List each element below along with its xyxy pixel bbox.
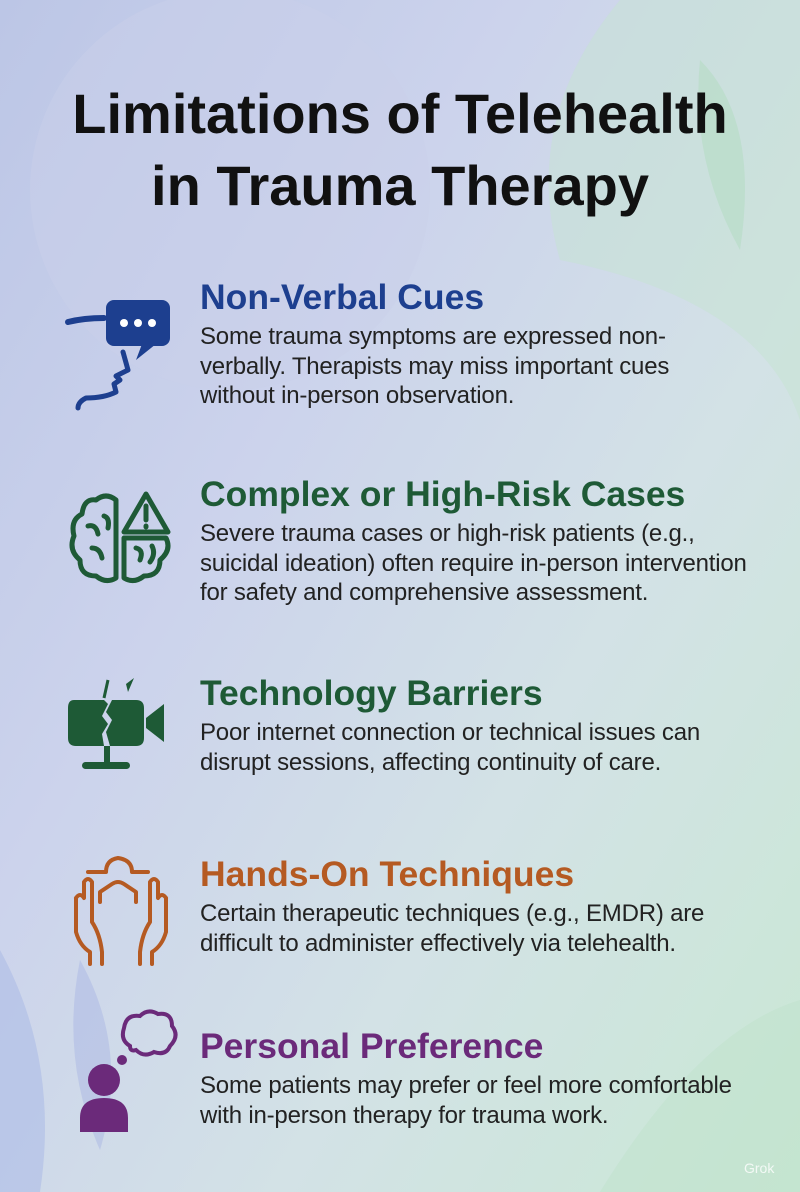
title: Limitations of Telehealth (72, 82, 728, 145)
heading + text: technology barriers: Poor internet connection or technical issues can (200, 719, 700, 746)
title (72, 82, 728, 217)
title: in Trauma Therapy (151, 154, 649, 217)
heading + text: hands-on techniques (200, 854, 704, 956)
heading + text: non-verbal cues (200, 277, 669, 409)
icon: face with speech bubble (65, 300, 170, 410)
heading + text: technology barriers (200, 673, 700, 776)
heading + text: personal preference: with in-person therapy for trauma work. (200, 1102, 608, 1128)
heading + text: hands-on techniques: Hands-On Techniques (200, 854, 574, 894)
icon: person with thought cloud (80, 1009, 178, 1132)
heading + text: complex cases (200, 474, 747, 606)
heading + text: non-verbal cues: Some trauma symptoms are expressed non- (200, 323, 666, 350)
watermark: Grok (744, 1160, 774, 1176)
icon: broken video camera (68, 678, 164, 769)
icon: hands holding person (74, 856, 168, 966)
heading + text: complex cases: for safety and comprehensive assessment. (200, 579, 648, 606)
heading + text: hands-on techniques: Certain therapeutic techniques (e.g., EMDR) are (200, 900, 704, 927)
heading + text: complex cases: suicidal ideation) often require in-person intervention (200, 550, 747, 576)
heading + text: non-verbal cues: verbally. Therapists may miss important cues (200, 352, 669, 380)
heading + text: hands-on techniques: difficult to administer effectively via telehealth. (200, 930, 676, 956)
heading + text: complex cases: Severe trauma cases or high-risk patients (e.g., (200, 520, 695, 547)
heading + text: non-verbal cues: Non-Verbal Cues (200, 277, 484, 317)
heading + text: complex cases: Complex or High-Risk Cases (200, 474, 685, 514)
heading + text: personal preference (200, 1026, 732, 1128)
heading + text: personal preference: Personal Preference (200, 1026, 543, 1066)
icon: brain with warning (69, 492, 171, 584)
heading + text: personal preference: Some patients may prefer or feel more comfortable (200, 1072, 732, 1099)
heading + text: non-verbal cues: without in-person observation. (200, 382, 514, 409)
heading + text: technology barriers: Technology Barriers (200, 673, 543, 713)
heading + text: technology barriers: disrupt sessions, affecting continuity of care. (200, 748, 661, 776)
